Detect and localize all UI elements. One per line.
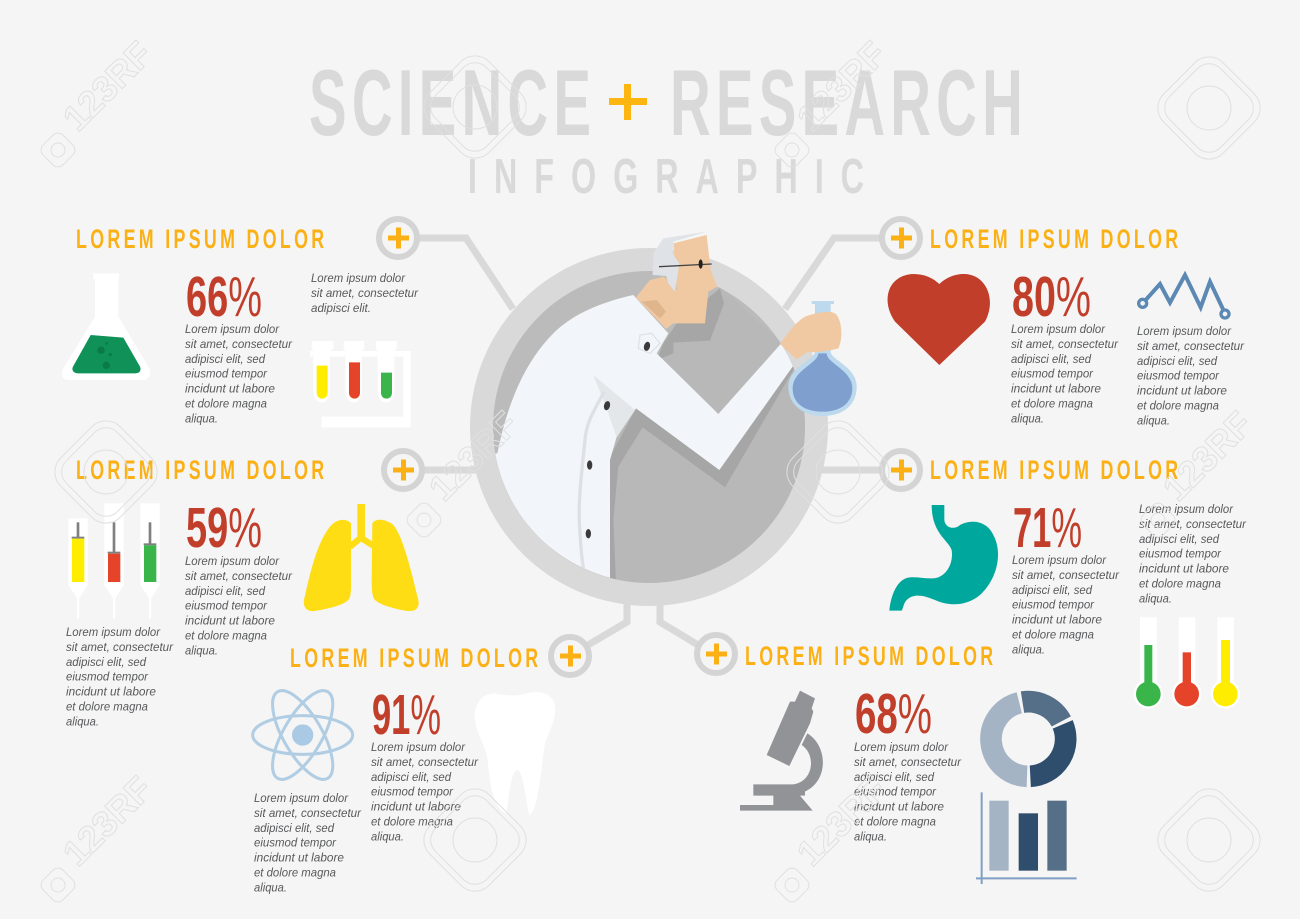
text block: et dolore magna xyxy=(371,814,453,828)
text block: incidunt ut labore xyxy=(1011,382,1101,396)
flask xyxy=(788,301,857,416)
side text: Lorem ipsum dolor xyxy=(1139,502,1234,516)
text block: incidunt ut labore xyxy=(854,800,944,814)
central circle with scientist xyxy=(470,232,857,620)
icon: flask xyxy=(62,273,150,380)
panel: 80 percent heart xyxy=(888,223,1245,427)
coat buttons xyxy=(586,341,651,538)
side text: incidunt ut labore xyxy=(1137,384,1227,398)
subtitle: INFOGRAPHIC xyxy=(468,148,864,204)
text block: Lorem ipsum dolor xyxy=(854,740,949,754)
watermark wordmarks: 123RF xyxy=(55,768,160,874)
percent: 59% xyxy=(186,496,262,560)
heading: LOREM IPSUM DOLOR xyxy=(930,223,1179,254)
coat seam xyxy=(579,392,604,568)
text block: sit amet, consectetur xyxy=(1011,337,1119,351)
heading: LOREM IPSUM DOLOR xyxy=(76,454,325,485)
icon: thermometers xyxy=(1134,617,1240,709)
marker top right xyxy=(882,219,920,257)
heading: LOREM IPSUM DOLOR xyxy=(930,454,1179,485)
percent: 66% xyxy=(186,265,262,329)
side text: eiusmod tempor xyxy=(1137,369,1220,383)
watermark wordmarks: 123RF xyxy=(1155,403,1260,509)
title plus sign xyxy=(609,84,647,120)
text block: Lorem ipsum dolor xyxy=(185,322,280,336)
text block: eiusmod tempor xyxy=(371,785,454,799)
neck shadow xyxy=(642,300,666,318)
side text xyxy=(1139,502,1247,605)
side text: sit amet, consectetur xyxy=(254,806,362,820)
clipped body and coat xyxy=(496,288,805,579)
side text: eiusmod tempor xyxy=(66,670,149,684)
panel: 91 percent atom and tooth xyxy=(253,642,555,894)
watermark wordmarks: 123RF xyxy=(789,33,894,139)
text block: Lorem ipsum dolor xyxy=(1011,322,1106,336)
side text: sit amet, consectetur xyxy=(1137,339,1245,353)
lapel panel xyxy=(593,375,635,437)
side text: et dolore magna xyxy=(1137,398,1219,412)
heading: LOREM IPSUM DOLOR xyxy=(290,642,539,673)
side text: sit amet, consectetur xyxy=(1139,517,1247,531)
side text: aliqua. xyxy=(1137,413,1170,427)
text block: aliqua. xyxy=(854,829,887,843)
side text: aliqua. xyxy=(254,880,287,894)
side text: incidunt ut labore xyxy=(66,685,156,699)
text block: eiusmod tempor xyxy=(854,785,937,799)
text block: incidunt ut labore xyxy=(1012,613,1102,627)
arm shadow xyxy=(608,360,797,582)
text block xyxy=(371,740,479,843)
side text xyxy=(1137,324,1245,427)
text block: aliqua. xyxy=(1012,642,1045,656)
inner disc xyxy=(493,271,805,583)
text block: aliqua. xyxy=(371,829,404,843)
icon: line chart xyxy=(1139,275,1229,318)
icon: stomach xyxy=(889,505,998,611)
plus markers xyxy=(379,219,920,675)
percent: 68% xyxy=(855,682,932,746)
marker top left xyxy=(379,219,417,257)
icon: atom xyxy=(253,682,353,788)
neck and face xyxy=(636,235,717,329)
bar chart xyxy=(976,792,1077,884)
title word: science: SCIENCE xyxy=(309,51,591,156)
side text: adipisci elit, sed xyxy=(1139,532,1219,546)
donut chart xyxy=(991,702,1066,776)
text block: Lorem ipsum dolor xyxy=(185,554,280,568)
text block: eiusmod tempor xyxy=(185,367,268,381)
marker middle right xyxy=(882,451,920,489)
heading: LOREM IPSUM DOLOR xyxy=(745,640,994,671)
text block: adipisci elit, sed xyxy=(854,770,934,784)
text block: sit amet, consectetur xyxy=(854,755,962,769)
percent: 80% xyxy=(1012,265,1091,329)
side text: adipisci elit, sed xyxy=(254,821,334,835)
side text: Lorem ipsum dolor xyxy=(311,271,406,285)
text block: aliqua. xyxy=(185,411,218,425)
percent: 91% xyxy=(372,683,441,747)
watermark camera marks xyxy=(38,130,1178,905)
heading: LOREM IPSUM DOLOR xyxy=(76,223,325,254)
side text: adipisci elit, sed xyxy=(66,655,146,669)
side text: et dolore magna xyxy=(66,700,148,714)
icon: heart xyxy=(888,274,990,365)
text block: et dolore magna xyxy=(1011,396,1093,410)
text block: eiusmod tempor xyxy=(1011,367,1094,381)
text block: incidunt ut labore xyxy=(185,382,275,396)
side text: Lorem ipsum dolor xyxy=(66,625,161,639)
marker middle left xyxy=(384,451,422,489)
text block xyxy=(1012,553,1120,656)
text block: eiusmod tempor xyxy=(1012,598,1095,612)
title word: research: RESEARCH xyxy=(670,51,1023,156)
side text xyxy=(311,271,419,315)
connector lines xyxy=(415,238,882,645)
text block: sit amet, consectetur xyxy=(185,569,293,583)
text block: et dolore magna xyxy=(854,814,936,828)
text block: sit amet, consectetur xyxy=(371,755,479,769)
side text: Lorem ipsum dolor xyxy=(1137,324,1232,338)
panel: 68 percent microscope and charts xyxy=(740,640,1077,884)
glasses xyxy=(659,259,712,269)
side text: eiusmod tempor xyxy=(1139,547,1222,561)
text block: aliqua. xyxy=(185,643,218,657)
text block: et dolore magna xyxy=(185,628,267,642)
side text: aliqua. xyxy=(1139,591,1172,605)
text block: sit amet, consectetur xyxy=(1012,568,1120,582)
side text: aliqua. xyxy=(66,714,99,728)
collar shadow xyxy=(657,288,724,360)
text block: Lorem ipsum dolor xyxy=(1012,553,1107,567)
text block: sit amet, consectetur xyxy=(185,337,293,351)
watermark wordmarks: 123RF xyxy=(55,33,160,139)
coat xyxy=(496,295,793,578)
title xyxy=(309,51,1023,204)
icon: lungs xyxy=(304,504,419,611)
vest xyxy=(719,288,805,436)
text block: adipisci elit, sed xyxy=(185,352,265,366)
percent: 71% xyxy=(1013,496,1082,560)
text block xyxy=(185,322,293,425)
text block: adipisci elit, sed xyxy=(371,770,451,784)
icon: test tubes xyxy=(310,341,411,427)
icon: microscope xyxy=(740,691,823,811)
text block: Lorem ipsum dolor xyxy=(371,740,466,754)
side text xyxy=(66,625,174,728)
side text: eiusmod tempor xyxy=(254,836,337,850)
text block: adipisci elit, sed xyxy=(1011,352,1091,366)
text block: et dolore magna xyxy=(1012,628,1094,642)
text block xyxy=(185,554,293,657)
side text: et dolore magna xyxy=(254,866,336,880)
side text xyxy=(254,791,362,894)
hand xyxy=(780,312,841,359)
marker bottom left xyxy=(551,637,589,675)
text block: aliqua. xyxy=(1011,411,1044,425)
text block: incidunt ut labore xyxy=(185,614,275,628)
text block: incidunt ut labore xyxy=(371,800,461,814)
side text: incidunt ut labore xyxy=(1139,562,1229,576)
scientist figure xyxy=(477,232,857,620)
text block: eiusmod tempor xyxy=(185,599,268,613)
panel: 59 percent lungs xyxy=(66,454,419,728)
side text: et dolore magna xyxy=(1139,576,1221,590)
text block: et dolore magna xyxy=(185,396,267,410)
side text: adipisci elit. xyxy=(311,301,371,315)
panel: 66 percent flask xyxy=(62,223,419,427)
panel: 71 percent stomach xyxy=(889,454,1247,709)
cuff xyxy=(638,333,660,353)
side text: incidunt ut labore xyxy=(254,851,344,865)
watermark wordmarks: 123RF xyxy=(421,403,526,509)
text block xyxy=(854,740,962,843)
side text: sit amet, consectetur xyxy=(311,286,419,300)
outer ring xyxy=(470,248,828,606)
text block: adipisci elit, sed xyxy=(1012,583,1092,597)
icon: tooth xyxy=(475,692,555,815)
text block xyxy=(1011,322,1119,425)
text block: adipisci elit, sed xyxy=(185,584,265,598)
hair xyxy=(653,232,707,292)
side text: sit amet, consectetur xyxy=(66,640,174,654)
side text: adipisci elit, sed xyxy=(1137,354,1217,368)
icon: syringes xyxy=(68,503,160,618)
marker bottom right xyxy=(697,635,735,673)
side text: Lorem ipsum dolor xyxy=(254,791,349,805)
watermark wordmarks: 123RF xyxy=(789,768,894,874)
